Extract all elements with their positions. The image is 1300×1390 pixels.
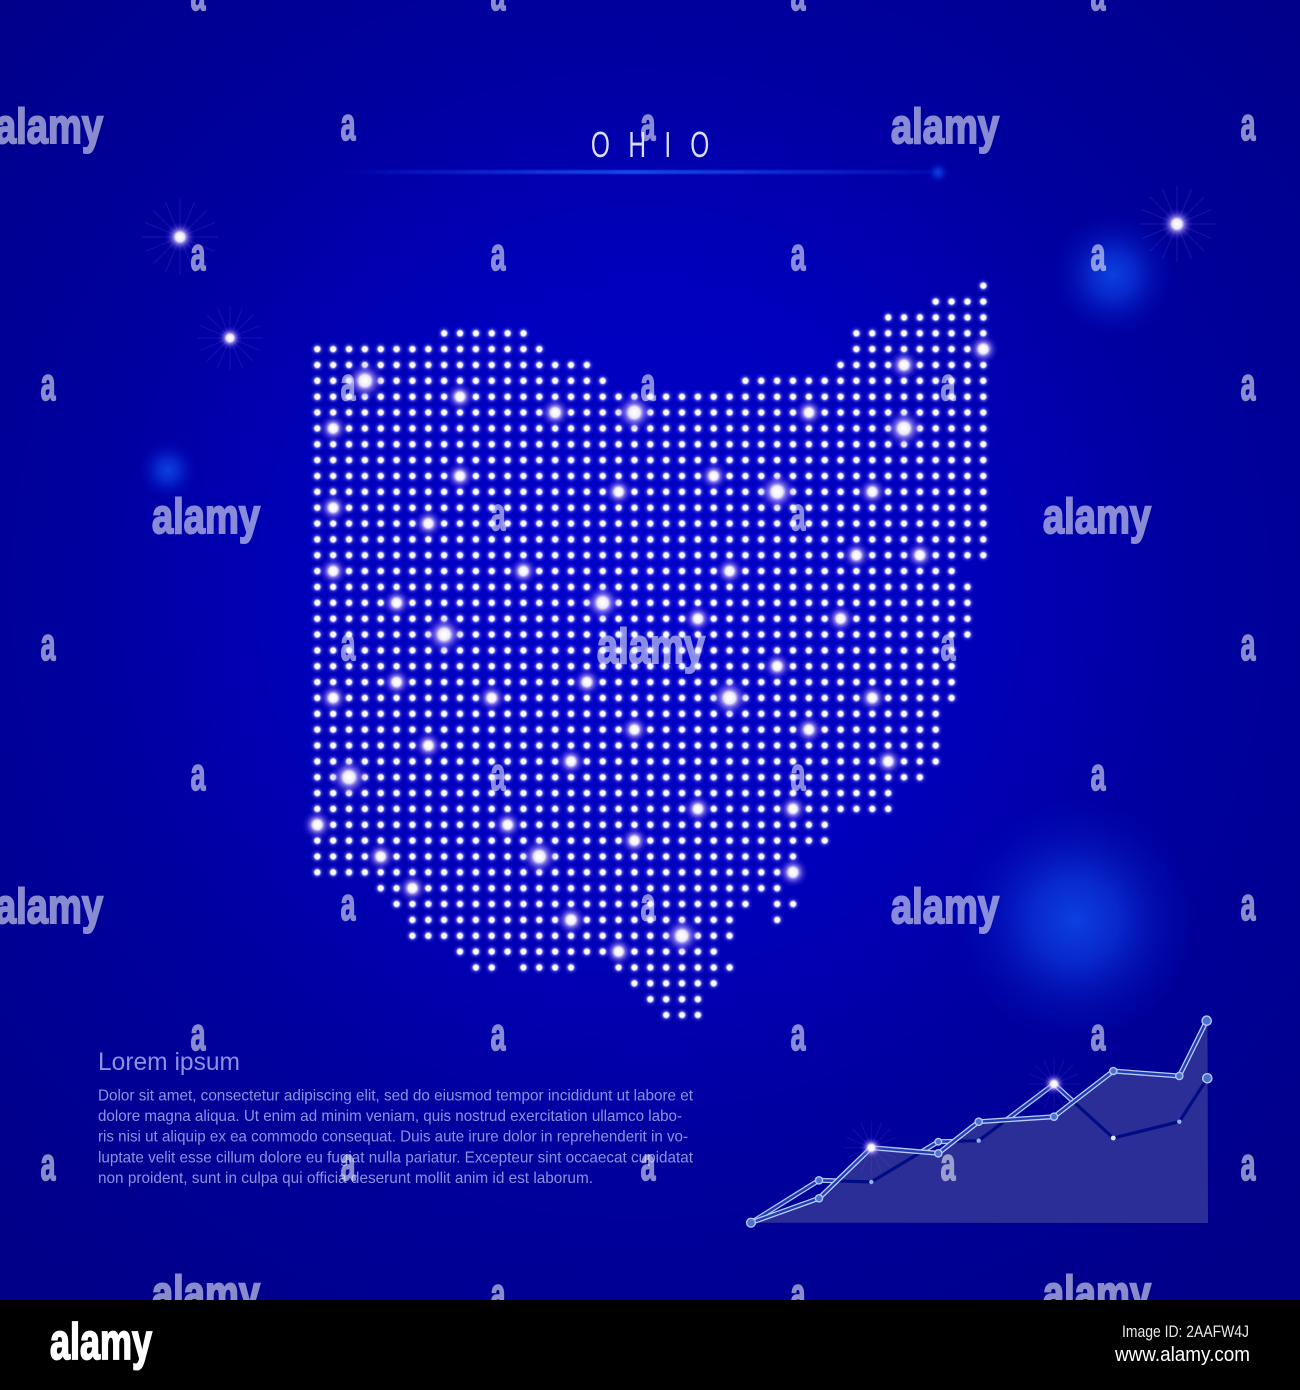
small watermark letters: a (341, 98, 356, 150)
footer logo: alamy (50, 1313, 152, 1370)
big watermark words: alamy (1043, 1267, 1151, 1321)
body text: ris nisi ut aliquip ex ea commodo consequat. Duis aute irure dolor in reprehenderit in vo- (98, 1128, 688, 1146)
small watermark letters: a (341, 1138, 356, 1190)
small watermark letters: a (491, 1268, 506, 1320)
small watermark letters: a (191, 228, 206, 280)
text block: Lorem ipsum (98, 1048, 694, 1187)
title: OHIO: OHIO (591, 124, 709, 165)
small watermark letters: a (1091, 748, 1106, 800)
small watermark letters: a (1241, 98, 1256, 150)
small watermark letters: a (1091, 1008, 1106, 1060)
small watermark letters: a (941, 358, 956, 410)
small watermark letters: a (41, 1138, 56, 1190)
small watermark letters: a (1241, 618, 1256, 670)
small watermark letters: a (341, 878, 356, 930)
sparkling stars (142, 186, 1215, 370)
small watermark letters: a (1241, 1138, 1256, 1190)
small watermark letters: a (641, 358, 656, 410)
small watermark letters: a (791, 1008, 806, 1060)
heading: Lorem ipsum (98, 1048, 240, 1076)
big watermark words (0, 100, 1151, 1321)
bright city lights (302, 334, 998, 966)
small watermark letters: a (941, 618, 956, 670)
small watermark letters: a (1091, 228, 1106, 280)
small watermark letters: a (491, 488, 506, 540)
series 1 line (751, 1021, 1207, 1223)
big watermark words: alamy (1043, 490, 1151, 544)
small watermark letters: a (791, 1268, 806, 1320)
body text: dolore magna aliqua. Ut enim ad minim veniam, quis nostrud exercitation ullamco labo- (98, 1108, 682, 1125)
big watermark words: alamy (891, 880, 999, 934)
website: www.alamy.com (1114, 1344, 1250, 1366)
data point markers (747, 1016, 1212, 1227)
small watermark letters: a (491, 228, 506, 280)
body text: non proident, sunt in culpa qui officia deserunt mollit anim id est laborum. (98, 1170, 593, 1187)
small watermark letters: a (641, 1138, 656, 1190)
small watermark letters: a (191, 1008, 206, 1060)
body text: luptate velit esse cillum dolore eu fugiat nulla pariatur. Excepteur sint occaecat cupidatat (98, 1150, 694, 1166)
big watermark words: alamy (891, 100, 999, 154)
small watermark letters: a (791, 488, 806, 540)
dotted map of Ohio (302, 286, 998, 1015)
small watermark letters: a (941, 1138, 956, 1190)
body text: Dolor sit amet, consectetur adipiscing elit, sed do eiusmod tempor incididunt ut labore et (98, 1088, 694, 1104)
small watermark letters: a (41, 358, 56, 410)
series 2 line (751, 1078, 1207, 1223)
small watermark letters: a (791, 748, 806, 800)
background light blobs (138, 213, 1197, 1042)
small watermark letters: a (791, 228, 806, 280)
image id: Image ID: 2AAFW4J (1122, 1322, 1249, 1341)
series 2 small markers (869, 1120, 1182, 1184)
title underline with dot (335, 162, 949, 184)
area fill (751, 1021, 1208, 1223)
data point flares (845, 1057, 1081, 1174)
small watermark letters: a (491, 1008, 506, 1060)
small watermark letters: a (1241, 358, 1256, 410)
big watermark words: alamy (597, 620, 705, 674)
body text (98, 1088, 694, 1187)
line and area chart (747, 1016, 1212, 1227)
small watermark letters: a (641, 98, 656, 150)
small watermark letters: a (491, 748, 506, 800)
small watermark letters: a (1241, 878, 1256, 930)
small watermark letters: a (191, 748, 206, 800)
small watermark letters: a (641, 878, 656, 930)
small watermark letters: a (341, 358, 356, 410)
big watermark words: alamy (152, 490, 260, 544)
footer bar (0, 1300, 1300, 1390)
big watermark words: alamy (152, 1267, 260, 1321)
small watermark letters: a (41, 618, 56, 670)
small watermark letters: a (341, 618, 356, 670)
